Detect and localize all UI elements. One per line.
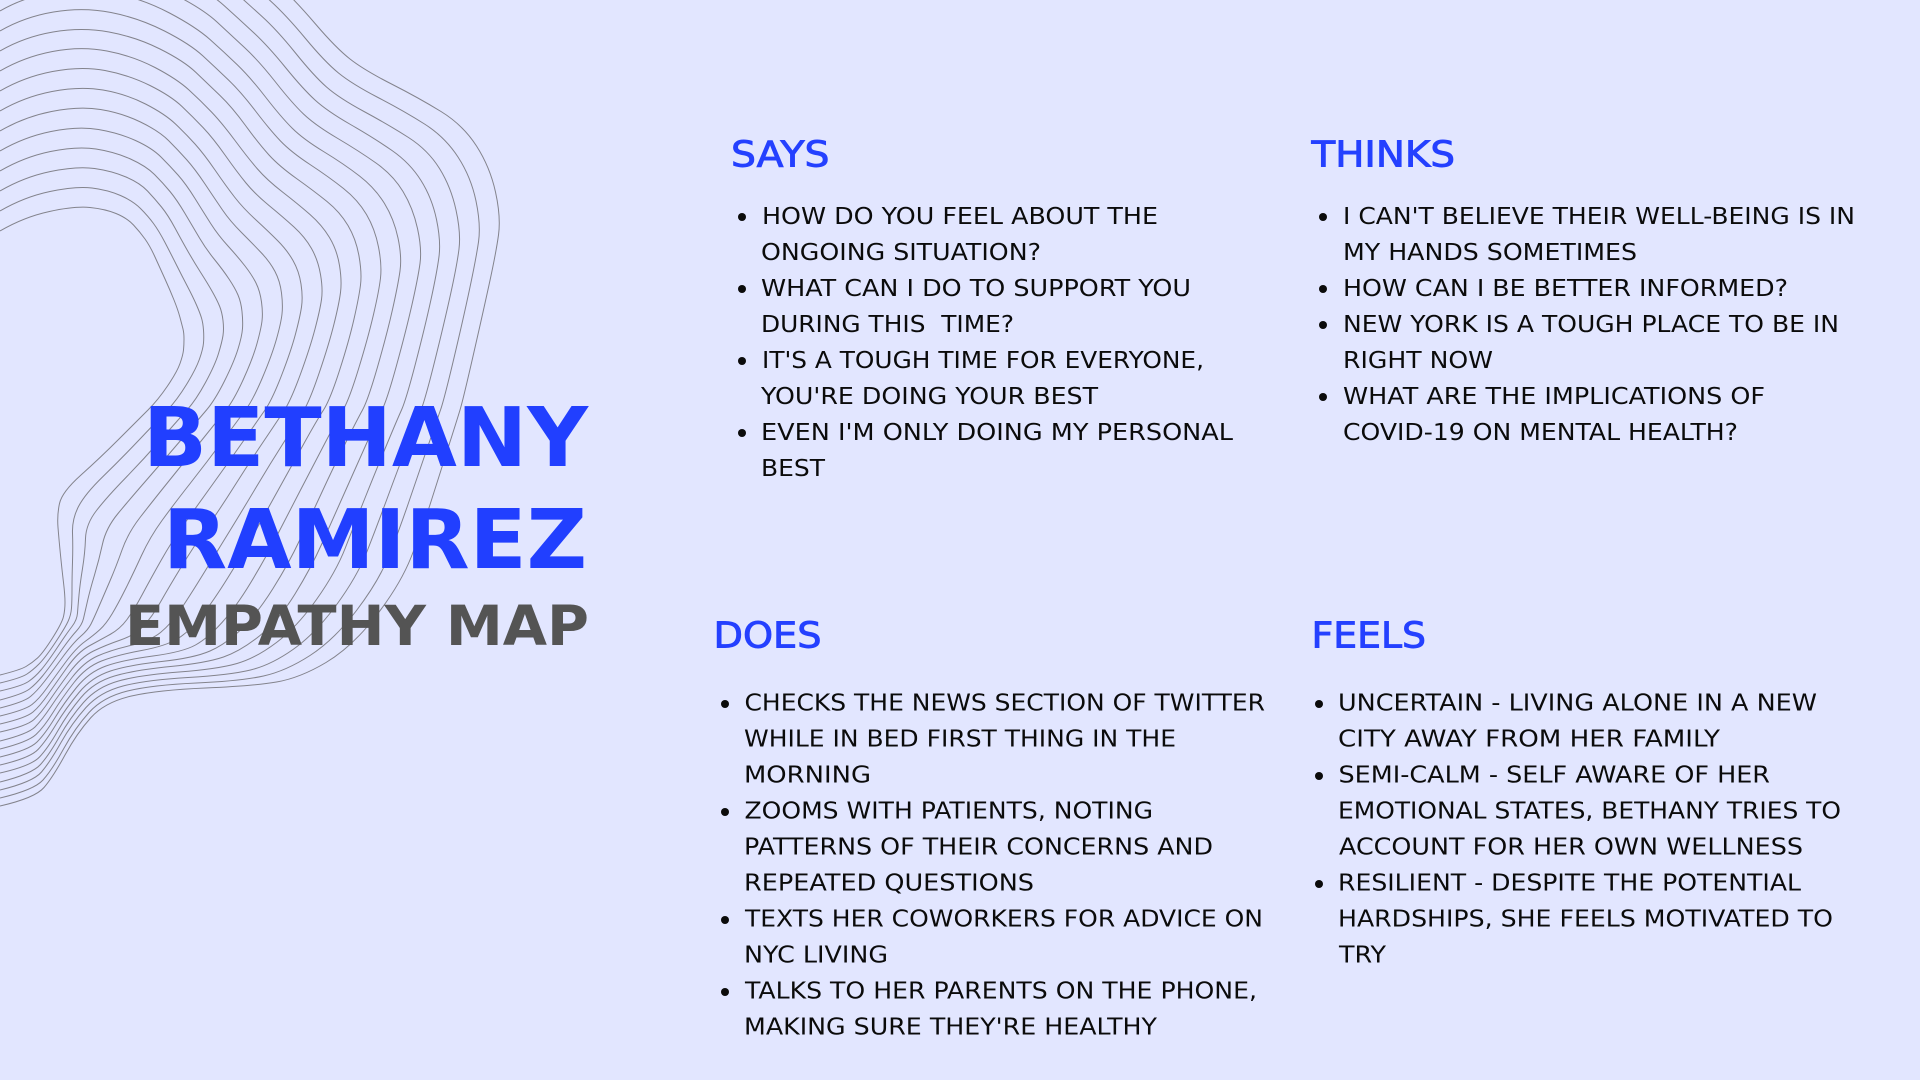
panel: thinks	[1310, 134, 1855, 446]
list: feels: UNCERTAIN - LIVING ALONE IN A NEW	[1338, 691, 1817, 717]
list: says: DURING THIS TIME?	[761, 312, 1014, 338]
list: thinks: NEW YORK IS A TOUGH PLACE TO BE IN	[1343, 312, 1839, 338]
list: does	[721, 691, 1265, 1041]
list: feels: EMOTIONAL STATES, BETHANY TRIES TO	[1338, 799, 1841, 825]
list: does: TEXTS HER COWORKERS FOR ADVICE ON	[744, 907, 1263, 933]
list: does: WHILE IN BED FIRST THING IN THE	[744, 727, 1176, 753]
list: says	[738, 204, 1233, 482]
list: feels: TRY	[1338, 943, 1387, 969]
list: says: YOU'RE DOING YOUR BEST	[760, 384, 1099, 410]
panel: says	[731, 134, 1233, 482]
list: does: MORNING	[744, 763, 871, 789]
heading: says: SAYS	[731, 134, 830, 176]
list: does: REPEATED QUESTIONS	[744, 871, 1034, 897]
title block	[125, 391, 590, 658]
list: thinks: MY HANDS SOMETIMES	[1343, 240, 1637, 266]
list: does: PATTERNS OF THEIR CONCERNS AND	[744, 835, 1213, 861]
list: feels: RESILIENT - DESPITE THE POTENTIAL	[1338, 871, 1801, 897]
list: says: EVEN I'M ONLY DOING MY PERSONAL	[761, 420, 1233, 446]
decorative contour line topography	[0, 0, 499, 806]
list: feels: HARDSHIPS, SHE FEELS MOTIVATED TO	[1338, 907, 1833, 933]
heading: does: DOES	[714, 616, 822, 657]
subtitle: EMPATHY MAP: EMPATHY MAP	[125, 594, 589, 658]
list: thinks: I CAN'T BELIEVE THEIR WELL-BEING IS IN	[1343, 204, 1855, 230]
panel: does	[714, 616, 1265, 1041]
list: does: TALKS TO HER PARENTS ON THE PHONE,	[744, 979, 1257, 1005]
list: thinks: WHAT ARE THE IMPLICATIONS OF	[1343, 384, 1765, 410]
list: does: CHECKS THE NEWS SECTION OF TWITTER	[744, 691, 1265, 717]
list: does: MAKING SURE THEY'RE HEALTHY	[744, 1015, 1158, 1041]
list: says: WHAT CAN I DO TO SUPPORT YOU	[761, 276, 1191, 302]
heading: thinks: THINKS	[1310, 134, 1455, 176]
panel: feels	[1312, 616, 1841, 969]
list: does: NYC LIVING	[744, 943, 888, 969]
title: RAMIREZ: RAMIREZ	[163, 493, 587, 588]
list: feels: CITY AWAY FROM HER FAMILY	[1338, 727, 1721, 753]
list: says: ONGOING SITUATION?	[761, 240, 1041, 266]
list: says: IT'S A TOUGH TIME FOR EVERYONE,	[762, 348, 1204, 374]
list: thinks: RIGHT NOW	[1343, 348, 1493, 374]
list: feels: SEMI-CALM - SELF AWARE OF HER	[1338, 763, 1770, 789]
list: thinks: COVID-19 ON MENTAL HEALTH?	[1343, 420, 1738, 446]
list: thinks: HOW CAN I BE BETTER INFORMED?	[1343, 276, 1788, 302]
heading: feels: FEELS	[1312, 616, 1426, 657]
list: feels	[1315, 691, 1841, 969]
list: thinks	[1319, 204, 1855, 446]
title: BETHANY: BETHANY	[143, 391, 590, 486]
list: says: HOW DO YOU FEEL ABOUT THE	[762, 204, 1158, 230]
list: does: ZOOMS WITH PATIENTS, NOTING	[744, 799, 1153, 825]
list: feels: ACCOUNT FOR HER OWN WELLNESS	[1339, 835, 1803, 861]
list: says: BEST	[761, 456, 826, 482]
